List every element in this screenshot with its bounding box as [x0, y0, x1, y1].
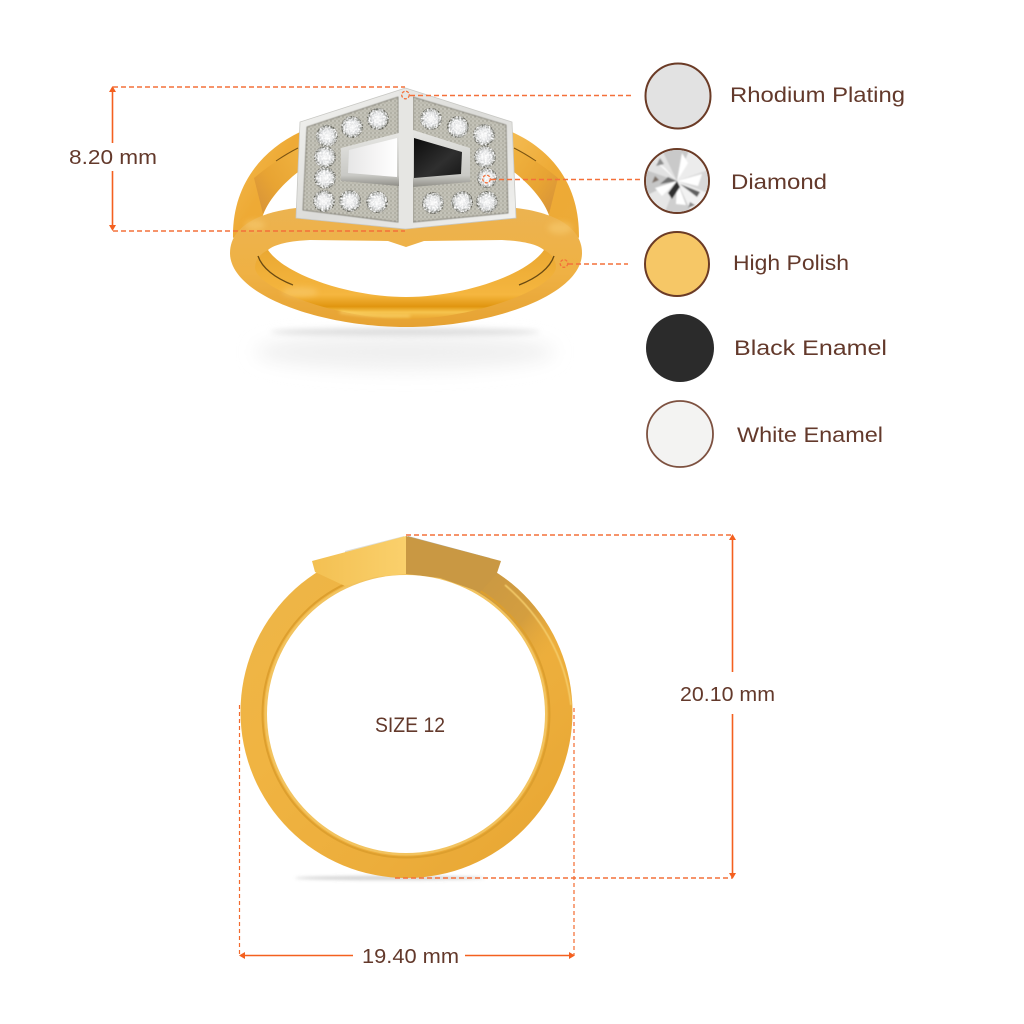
rhodium label: Rhodium Plating [730, 83, 905, 107]
diamond leader [483, 175, 640, 183]
head metal plate [296, 88, 516, 229]
rhodium swatch [646, 64, 710, 128]
rhodium leader [402, 91, 631, 99]
high polish label: High Polish [733, 251, 849, 275]
front band [230, 208, 582, 327]
height label: 8.20 mm [69, 146, 157, 169]
width dimension: 19.40 mm [239, 705, 575, 968]
head side plate right [406, 536, 501, 592]
band inner wall [255, 250, 556, 319]
diamond swatch [645, 148, 710, 214]
enamel frame right [413, 130, 470, 187]
head setting [296, 88, 516, 229]
callout leaders [402, 91, 640, 267]
height dimension: 20.10 mm [395, 534, 775, 879]
band highlights [245, 220, 572, 297]
black enamel [414, 138, 462, 178]
head side plate left [312, 536, 406, 586]
enamel frame left [341, 133, 399, 186]
pave panel right [413, 97, 508, 222]
front view ring [230, 88, 582, 370]
rear split band left [233, 132, 300, 238]
ring opening [267, 575, 545, 853]
high polish leader [560, 260, 628, 267]
diamond peek left [345, 536, 404, 553]
black enamel swatch [646, 314, 714, 382]
side ground shadow [295, 876, 485, 880]
diamonds left [313, 108, 389, 213]
diamond label: Diamond [731, 170, 827, 194]
height label: 20.10 mm [680, 683, 775, 706]
centre bar [399, 91, 413, 228]
inner wall shadow lines [258, 256, 554, 316]
diamonds right [420, 108, 498, 214]
ring opening [268, 240, 544, 297]
white enamel swatch [647, 401, 713, 467]
outer edge highlight [505, 585, 571, 705]
pave panel left [303, 97, 398, 222]
right shoulder shade [474, 573, 554, 646]
material legend [645, 64, 905, 467]
side view ring [240, 536, 581, 880]
ground shadow under front ring [255, 328, 555, 370]
black enamel label: Black Enamel [734, 336, 887, 360]
size label: SIZE 12 [375, 714, 445, 737]
inner highlight [264, 572, 548, 856]
front dimension: 8.20 mm [69, 86, 405, 231]
high polish swatch [645, 232, 709, 296]
width label: 19.40 mm [362, 945, 459, 968]
white enamel [348, 138, 397, 177]
outer shank [240, 546, 572, 878]
white enamel label: White Enamel [737, 423, 883, 447]
diamond peek right [408, 536, 490, 561]
rear split band right [512, 132, 579, 238]
inner step [262, 570, 550, 858]
